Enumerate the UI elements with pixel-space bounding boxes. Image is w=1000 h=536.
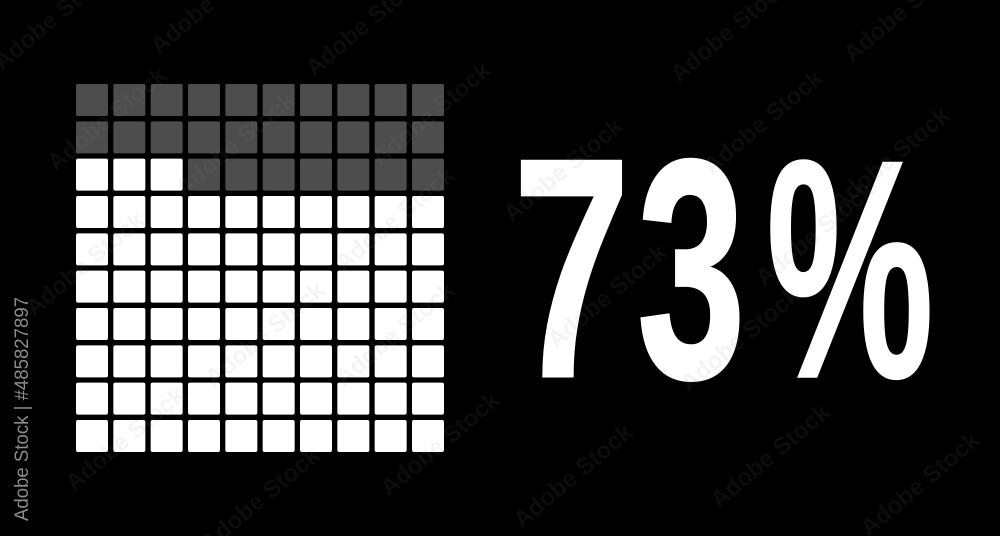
stock watermarks: Adobe Stock xyxy=(20,206,151,322)
stock watermarks: Adobe Stock xyxy=(705,398,836,514)
digit 7: 7 xyxy=(512,93,631,445)
stock watermarks: Adobe Stock xyxy=(498,112,629,228)
stock watermarks: Adobe Stock xyxy=(170,86,301,202)
stock watermarks: Adobe Stock xyxy=(698,64,829,180)
waffle chart: 73 of 100 squares filled xyxy=(76,84,444,452)
digit 3: 3 xyxy=(637,95,746,444)
percent sign: % xyxy=(766,95,934,444)
big percentage value xyxy=(512,93,934,445)
stock watermarks: Adobe Stock xyxy=(825,101,956,217)
stock watermarks: Adobe Stock xyxy=(375,386,506,502)
filled squares: 73 white xyxy=(76,159,444,452)
remaining squares: 27 grey xyxy=(76,84,444,191)
stock watermarks: Adobe Stock xyxy=(675,281,806,397)
vertical credit text: Adobe Stock | #485827897 xyxy=(12,297,33,521)
stock watermarks: Adobe Stock xyxy=(750,176,881,292)
stock watermarks: Adobe Stock xyxy=(200,276,331,392)
stock watermarks: Adobe Stock xyxy=(42,61,173,177)
stock watermarks: Adobe Stock xyxy=(508,418,639,534)
stock watermarks: Adobe Stock xyxy=(330,276,461,392)
stock watermarks: Adobe Stock xyxy=(366,56,497,172)
stock watermarks: Adobe Stock xyxy=(330,161,461,277)
stock watermarks: Adobe Stock xyxy=(60,381,191,497)
stock watermarks: Adobe Stock xyxy=(542,238,673,354)
